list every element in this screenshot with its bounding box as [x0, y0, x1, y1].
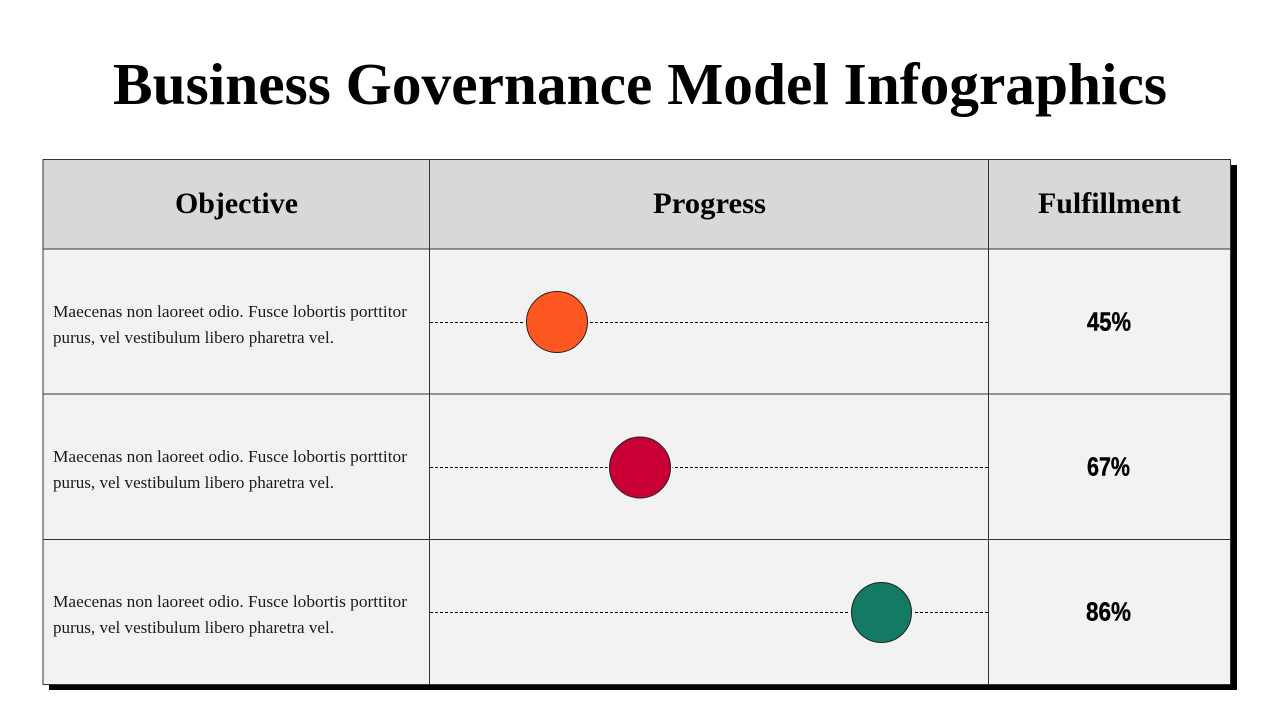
- table shadow: [49, 165, 1237, 690]
- heading: Fulfillment: Fulfillment: [1038, 187, 1181, 220]
- row 1 objective text: [53, 302, 408, 347]
- heading: Objective: Objective: [175, 187, 298, 220]
- body rows background: [43, 249, 1230, 685]
- row 2 objective text: Maecenas non laoreet odio. Fusce lobortis porttitor: [53, 447, 408, 466]
- row 1 fulfillment value: 45%: [1087, 306, 1131, 336]
- row 1 objective text: Maecenas non laoreet odio. Fusce lobortis porttitor: [53, 302, 408, 321]
- row 2 fulfillment value: 67%: [1087, 452, 1130, 482]
- row 3 progress track and marker: [430, 580, 988, 644]
- row 3 objective text: [53, 592, 408, 637]
- row 2 objective text: purus, vel vestibulum libero pharetra vel.: [53, 473, 334, 492]
- title: Business Governance Model Infographics: [113, 51, 1167, 117]
- row 1 objective text: purus, vel vestibulum libero pharetra vel.: [53, 328, 334, 347]
- row 3 objective text: purus, vel vestibulum libero pharetra vel.: [53, 618, 334, 637]
- row 3 fulfillment value: 86%: [1086, 596, 1131, 626]
- row 2 progress track and marker: [430, 435, 988, 500]
- row 1 progress track and marker: [430, 290, 988, 354]
- heading: Progress: Progress: [653, 187, 766, 220]
- row 3 objective text: Maecenas non laoreet odio. Fusce lobortis porttitor: [53, 592, 408, 611]
- panel: governance table: [43, 159, 1231, 685]
- table grid lines: [43, 159, 1231, 685]
- row 2 objective text: [53, 447, 408, 492]
- header row background: [43, 159, 1230, 249]
